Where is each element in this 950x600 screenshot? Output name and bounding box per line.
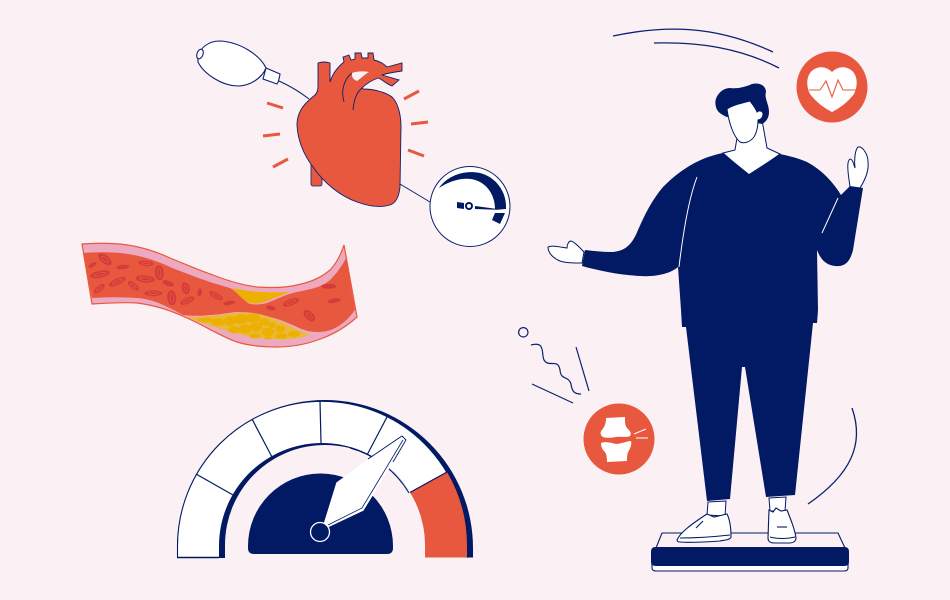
person bbox=[548, 83, 868, 571]
icon: blood pressure bulb bbox=[195, 41, 309, 99]
gauge red zone bbox=[409, 472, 467, 558]
plaque lower bbox=[186, 313, 310, 340]
hand right bbox=[848, 147, 868, 188]
pain marks bbox=[519, 328, 589, 403]
scale bbox=[651, 533, 849, 571]
icon: pressure dial bbox=[400, 166, 510, 246]
sweater and trousers bbox=[582, 153, 863, 501]
gauge bbox=[177, 400, 473, 558]
face bbox=[727, 101, 763, 143]
motion lines bbox=[613, 29, 857, 504]
shoes bbox=[677, 508, 796, 543]
plaque upper bbox=[231, 288, 290, 304]
artery with plaque bbox=[82, 243, 357, 347]
icon: knee joint badge bbox=[584, 404, 654, 474]
heartbeat rays bbox=[263, 91, 428, 167]
neck and chest bbox=[723, 120, 780, 176]
red blood cell centres bbox=[94, 255, 313, 320]
hand left bbox=[548, 241, 584, 263]
icon: heart bbox=[297, 53, 402, 206]
socks bbox=[707, 497, 786, 516]
gauge dome bbox=[248, 474, 393, 554]
hair bbox=[715, 83, 769, 124]
icon: heart health badge bbox=[796, 52, 868, 122]
artery lumen bbox=[83, 252, 355, 332]
red blood cells bbox=[87, 251, 341, 323]
gauge needle bbox=[310, 436, 406, 542]
clothing folds bbox=[679, 177, 838, 267]
artery wall bbox=[82, 243, 357, 347]
